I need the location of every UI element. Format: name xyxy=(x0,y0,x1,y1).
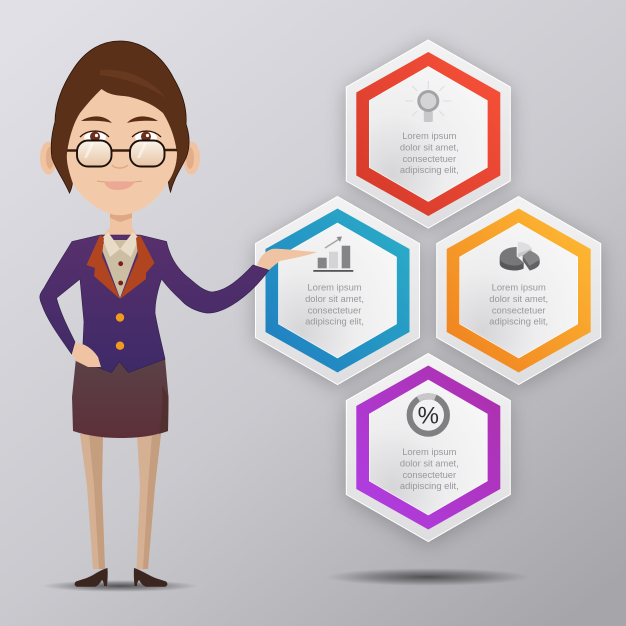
pointing hand xyxy=(257,249,317,270)
text block xyxy=(400,446,459,491)
neck xyxy=(102,212,138,250)
nose xyxy=(112,165,128,168)
blouse xyxy=(101,240,139,298)
hair highlight xyxy=(100,70,166,98)
text block: dolor sit amet, xyxy=(489,293,548,304)
panel: red hexagon xyxy=(346,40,510,228)
hair xyxy=(51,41,189,193)
text block: Lorem ipsum xyxy=(402,130,457,141)
hexagon soft shadows xyxy=(256,43,601,545)
glasses xyxy=(67,140,177,166)
text block: adipiscing elit, xyxy=(489,316,548,326)
text block: consectetuer xyxy=(308,304,361,316)
eyes xyxy=(80,131,161,143)
shoes xyxy=(75,568,167,587)
text block: Lorem ipsum xyxy=(307,282,362,292)
text block: dolor sit amet, xyxy=(400,458,459,468)
jacket and arms xyxy=(40,235,269,372)
mouth xyxy=(97,181,142,190)
icon: percent dial: % xyxy=(418,402,439,430)
floor shadow under character xyxy=(42,580,198,592)
text block: consectetuer xyxy=(402,469,456,480)
text block: dolor sit amet, xyxy=(400,142,459,152)
hip hand xyxy=(72,343,101,367)
panel: blue hexagon xyxy=(256,196,420,384)
text block: consectetuer xyxy=(492,304,546,316)
text block: Lorem ipsum xyxy=(402,446,457,457)
lapels xyxy=(86,235,154,299)
character: businesswoman xyxy=(40,41,317,587)
text block xyxy=(400,130,459,175)
face xyxy=(67,89,177,215)
text block: adipiscing elit, xyxy=(305,316,364,326)
text block: Lorem ipsum xyxy=(492,282,546,292)
ears xyxy=(40,142,200,174)
text block: consectetuer xyxy=(402,153,456,164)
text block xyxy=(489,282,548,326)
skirt xyxy=(72,358,168,438)
icon: percent dial xyxy=(410,396,447,434)
text block: dolor sit amet, xyxy=(305,293,364,304)
buttons xyxy=(116,261,124,350)
panel: purple hexagon xyxy=(346,354,510,542)
eyebrows xyxy=(81,116,158,123)
collar xyxy=(102,232,139,257)
legs xyxy=(80,434,161,569)
icon: bar chart xyxy=(313,236,353,272)
text block xyxy=(305,282,364,326)
floor shadow under hexagons xyxy=(326,568,530,586)
text block: adipiscing elit, xyxy=(400,480,459,491)
panel: orange hexagon xyxy=(437,196,601,384)
icon: pie chart xyxy=(500,242,540,270)
icon: light bulb xyxy=(405,81,451,122)
text block: adipiscing elit, xyxy=(400,164,459,175)
